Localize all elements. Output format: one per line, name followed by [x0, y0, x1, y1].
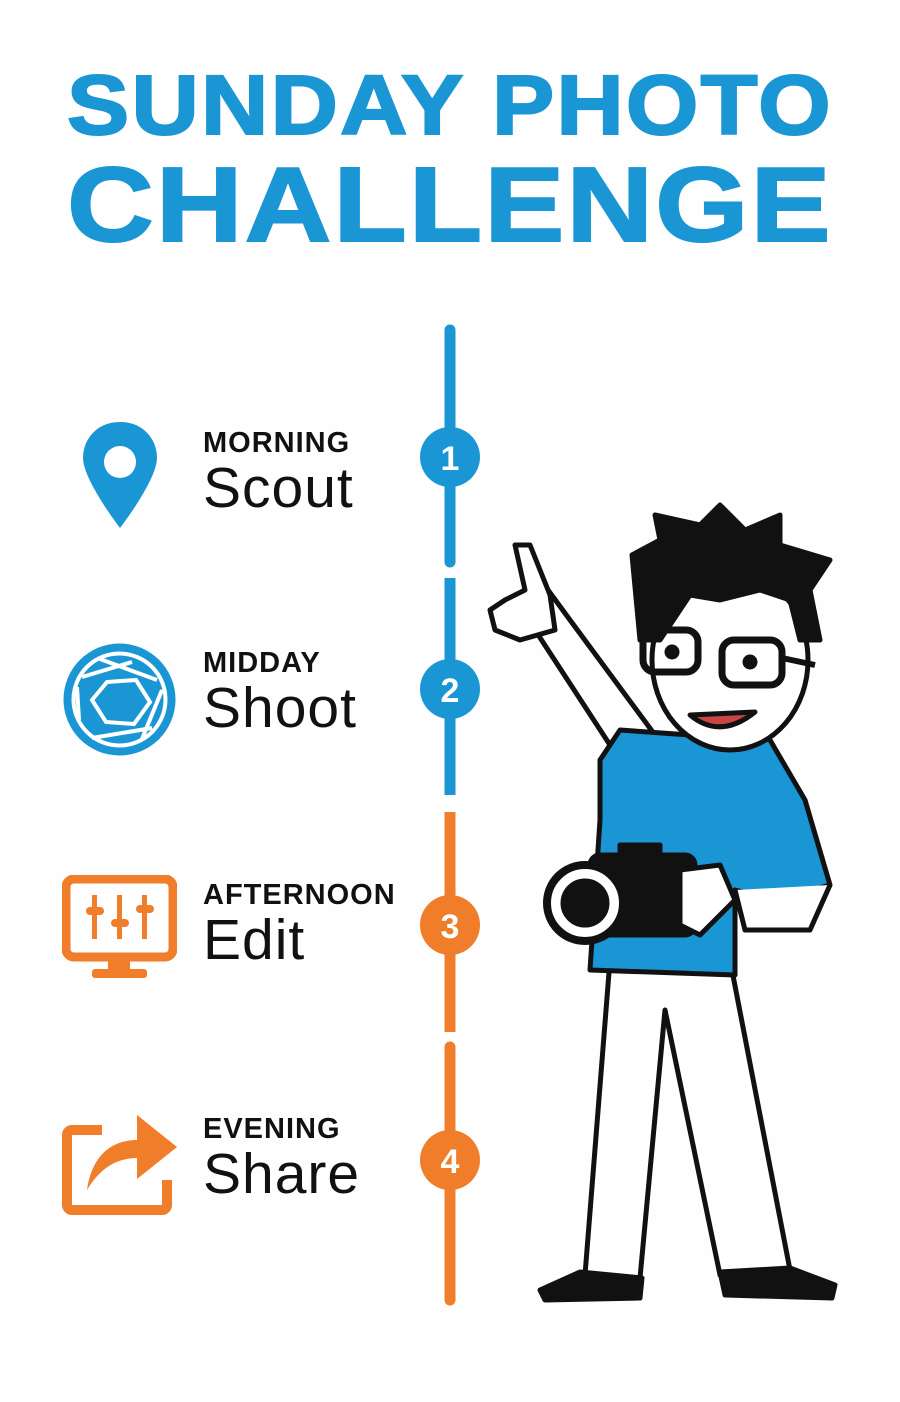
step 3 text: Edit — [203, 908, 305, 972]
step markers: 4 — [441, 1143, 460, 1181]
step 1 text: Scout — [203, 456, 354, 520]
raised arm — [535, 590, 655, 745]
icon: share — [62, 1115, 177, 1215]
title: SUNDAY PHOTO — [67, 58, 833, 152]
step 1 text: MORNING — [203, 427, 350, 459]
title: CHALLENGE — [67, 146, 833, 264]
right arm — [735, 885, 830, 930]
step markers: 1 — [441, 440, 459, 478]
step 4 text: EVENING — [203, 1113, 341, 1145]
step 2 text — [203, 647, 357, 740]
camera — [590, 855, 695, 935]
head — [652, 570, 808, 750]
legs — [585, 960, 790, 1278]
icon: monitor with sliders — [62, 875, 177, 978]
step 3 text: AFTERNOON — [203, 879, 396, 911]
step 2 text: Shoot — [203, 676, 357, 740]
step markers — [420, 427, 480, 1190]
step 4 text — [203, 1113, 360, 1206]
step markers: 3 — [441, 908, 459, 946]
step 2 text: MIDDAY — [203, 647, 321, 679]
illustration: photographer pointing up — [488, 502, 838, 1302]
title — [67, 58, 833, 264]
icon: map pin — [83, 422, 157, 528]
step 3 text — [203, 879, 396, 972]
step markers: 2 — [441, 672, 459, 710]
step 1 text — [203, 427, 354, 520]
torso shirt — [590, 720, 830, 975]
icon: aperture — [64, 644, 176, 756]
step 4 text: Share — [203, 1142, 360, 1206]
